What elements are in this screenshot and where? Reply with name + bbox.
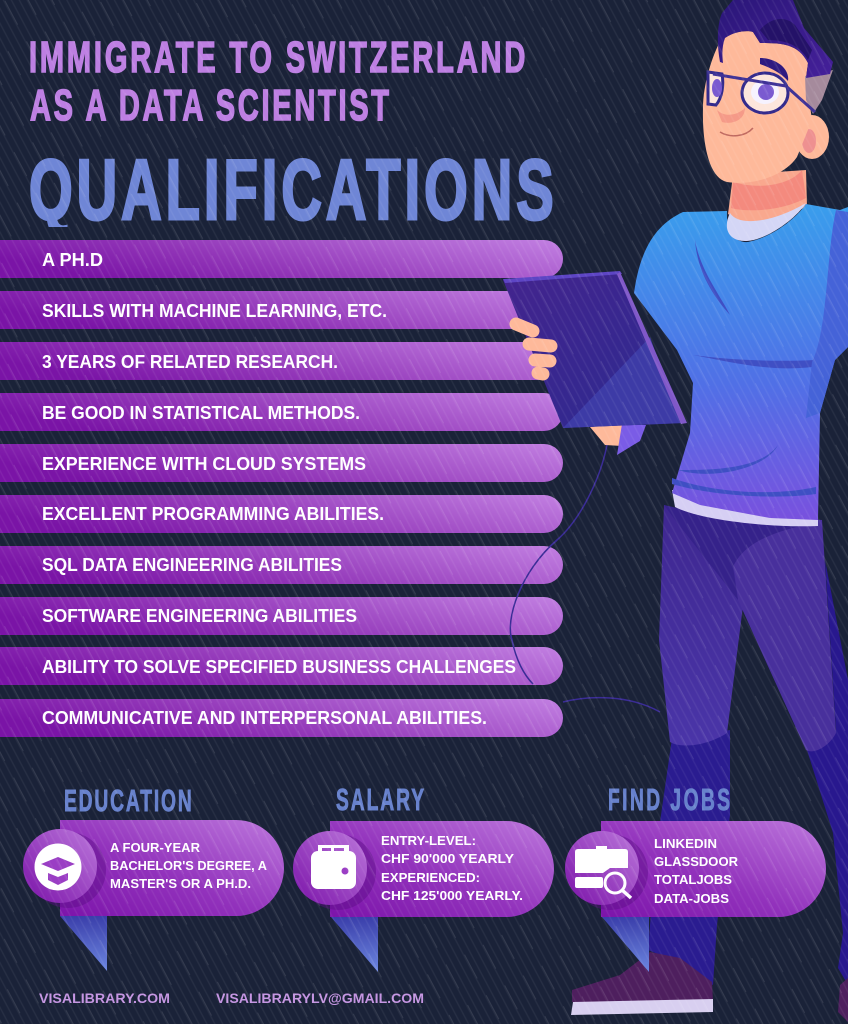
smile [720,128,753,136]
icon: graduation cap [34,844,82,890]
right lens [742,73,788,113]
bar 5: EXPERIENCE WITH CLOUD SYSTEMS [42,453,366,474]
bar 1 [0,240,563,278]
icon circle [565,831,639,905]
pill text: CHF 125'000 YEARLY. [381,888,523,903]
glasses [708,72,788,113]
sleeve cuff [617,424,646,455]
icon circle [293,831,367,905]
title [29,32,525,129]
title line 1: IMMIGRATE TO SWITZERLAND [29,32,525,81]
eyebrow [760,58,788,81]
tablet body [503,272,686,428]
right thigh [700,510,836,751]
pill text: ENTRY-LEVEL: [381,833,476,848]
circle shadow [30,832,106,908]
pill text: GLASSDOOR [654,854,739,869]
left lower leg [648,730,730,985]
pill text [381,833,523,903]
title line 2: AS A DATA SCIENTIST [30,80,389,129]
bar 9 [0,647,563,685]
panel: qualifications list [0,240,563,737]
hair highlight [760,19,812,60]
pill [601,821,826,917]
tablet lighter corner [563,337,681,428]
circle shadow [572,834,648,910]
panel: salary [293,784,554,972]
bar 6: EXCELLENT PROGRAMMING ABILITIES. [42,503,384,524]
pointer [602,917,649,972]
tablet and holding hand [503,271,687,428]
left lens [708,72,723,105]
tablet top edge [503,271,622,283]
right lower leg [807,560,848,985]
neck shadow [731,170,806,210]
bar 7 [0,546,563,584]
hair side fade [805,70,833,114]
bar 5 [0,444,563,482]
hair [718,0,833,78]
bar 10 [0,699,563,737]
bar 2 [0,291,563,329]
pill [60,820,284,916]
bar 8: SOFTWARE ENGINEERING ABILITIES [42,605,357,626]
sweater [634,204,848,520]
pill text: EXPERIENCED: [381,870,480,885]
eye left [712,79,722,97]
wire over bars [510,540,557,684]
pill text: CHF 90'000 YEARLY [381,851,514,866]
heading: salary: SALARY [336,784,424,817]
panel: find jobs [565,784,826,972]
bar 10: COMMUNICATIVE AND INTERPERSONAL ABILITIES. [42,707,487,728]
left shoe sole [571,999,713,1015]
pill text: A FOUR-YEAR [110,840,201,855]
left shoe [572,952,713,1002]
iris [758,84,774,100]
glasses arm [713,74,815,112]
pill text: BACHELOR'S DEGREE, A [110,858,268,873]
heading: find jobs: FIND JOBS [608,784,730,817]
circle shadow [300,834,376,910]
pill text: MASTER'S OR A PH.D. [110,876,251,891]
bar 8 [0,597,563,635]
icon: briefcase with magnifier [575,846,631,898]
bar 6 [0,495,563,533]
bar 2: SKILLS WITH MACHINE LEARNING, ETC. [42,300,387,321]
bar 1: A PH.D [42,249,103,270]
pants fold shadow [664,505,818,600]
heading: qualifications: QUALIFICATIONS [29,143,554,238]
footer website: VISALIBRARY.COM [39,990,170,1006]
pointer [331,917,378,972]
inner ear [802,129,816,153]
bar 3: 3 YEARS OF RELATED RESEARCH. [42,351,338,372]
collar [727,203,806,241]
lower hand [590,424,625,446]
nose [717,108,745,123]
pill text: DATA-JOBS [654,891,729,906]
pill text: TOTALJOBS [654,872,732,887]
pill text [110,840,268,891]
bar 4: BE GOOD IN STATISTICAL METHODS. [42,402,360,423]
icon: wallet [311,845,356,889]
tablet right edge [617,272,687,424]
bar 9: ABILITY TO SOLVE SPECIFIED BUSINESS CHALLENGES [42,656,516,677]
sweater folds [672,240,816,497]
pill text: LINKEDIN [654,836,717,851]
fingers [516,324,551,374]
right shoe [838,978,848,1022]
bar 4 [0,393,563,431]
neck [728,170,807,232]
illustration: young man holding tablet [510,0,848,1022]
pill text [654,836,739,906]
footer email: VISALIBRARYLV@GMAIL.COM [216,990,424,1006]
face [703,31,812,183]
pointer [60,916,107,971]
left thigh [659,505,745,745]
wire [510,445,660,712]
ear [795,115,829,159]
panel: education [23,785,284,971]
pill [330,821,554,917]
bar 3 [0,342,563,380]
eye right [751,80,779,104]
right arm shading [806,210,848,418]
heading: education: EDUCATION [64,785,192,818]
undershirt hem [672,490,818,526]
bar 7: SQL DATA ENGINEERING ABILITIES [42,554,342,575]
icon circle [23,829,97,903]
